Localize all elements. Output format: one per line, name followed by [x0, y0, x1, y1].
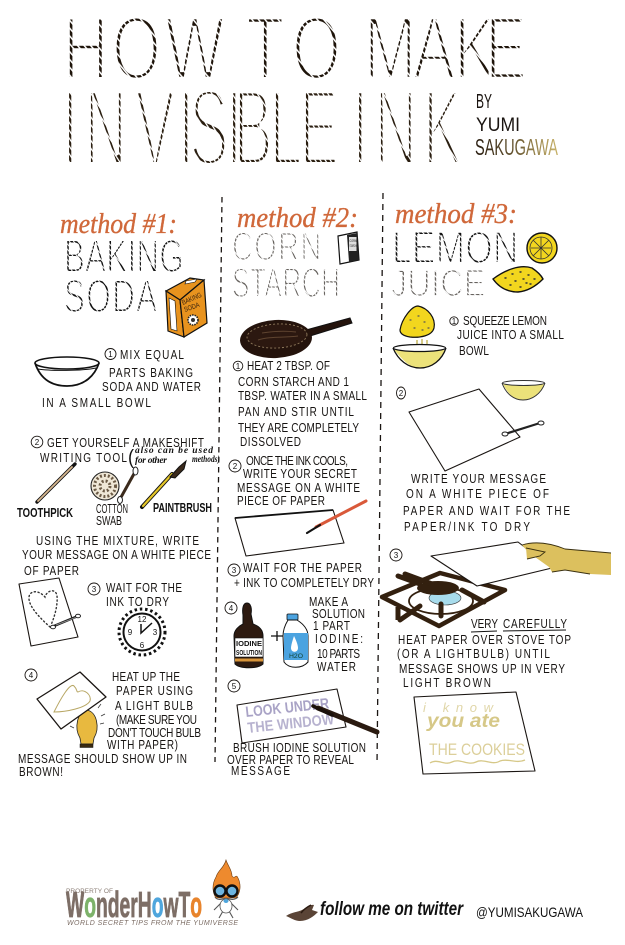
- step 1 text: TBSP. WATER IN A SMALL: [238, 390, 367, 403]
- step 5 text: [227, 742, 366, 778]
- step 4 text: DON'T TOUCH BULB: [108, 727, 201, 740]
- step 4 text: 4: [29, 671, 34, 680]
- step 4 text: MESSAGE SHOULD SHOW UP IN: [18, 753, 187, 766]
- heading: baking soda: SODA: [64, 271, 158, 323]
- heading: lemon juice: JUICE: [391, 263, 485, 305]
- step 2 text: PIECE OF PAPER: [237, 495, 325, 508]
- step 4 text: A LIGHT BULB: [115, 700, 193, 713]
- step 2 text: for other: [135, 456, 167, 466]
- step 5 number: [228, 680, 240, 692]
- icon: squeezed lemon over bowl: [393, 306, 446, 368]
- step 4 text: IODINE:: [315, 633, 363, 646]
- heading: baking soda: BAKING: [64, 231, 184, 283]
- footer: twitter text: @YUMISAKUGAWA: [476, 904, 584, 920]
- icon: clock: 6: [140, 641, 145, 650]
- icon: corn starch box: CORN: [350, 238, 357, 243]
- step 1 text: DISSOLVED: [240, 436, 301, 449]
- step 4 text: 1 PART: [313, 620, 350, 633]
- heading: corn starch: CORN: [232, 224, 321, 269]
- icon: toothpick: [37, 464, 75, 502]
- step 1 text: CORN STARCH AND 1: [238, 376, 349, 389]
- step 2 text: PAPER/INK TO DRY: [404, 521, 530, 534]
- step 2 text: [229, 455, 360, 508]
- icon: lemon slice: [527, 233, 557, 263]
- instruction text: USING THE MIXTURE, WRITE: [36, 535, 199, 548]
- icon: frying pan: [239, 318, 352, 360]
- step 2 text: 2: [35, 438, 40, 447]
- step 1 text: 1: [236, 362, 241, 371]
- step 2 text: WRITE YOUR SECRET: [243, 468, 357, 481]
- step 4 number: 4: [229, 604, 234, 613]
- step 2 text: ONCE THE INK COOLS,: [246, 455, 348, 468]
- step 3 text: LIGHT BROWN: [403, 677, 491, 690]
- heading: method 3: method #3:: [395, 199, 517, 230]
- step 3 text: [88, 582, 182, 609]
- tool labels: PAINTBRUSH: [153, 500, 212, 515]
- step 2 text: (: [128, 447, 134, 469]
- icon: light bulb and paper: [37, 672, 106, 748]
- step 4 text: MAKE A: [309, 596, 348, 609]
- step 4 text: BROWN!: [19, 766, 63, 779]
- icon: revealed message and brush: LOOK UNDER: [245, 695, 330, 721]
- instruction text: OF PAPER: [24, 565, 79, 578]
- step 1 text: HEAT 2 TBSP. OF: [247, 360, 330, 373]
- step 2 text: 2: [233, 462, 238, 471]
- icon: paper with brown message: THE COOKIES: [429, 740, 525, 759]
- icon: clock: 3: [153, 628, 158, 637]
- icon: paper with dotted heart: [19, 578, 80, 646]
- icon: paper with brown message: [414, 692, 535, 774]
- step 3 text: 3: [92, 585, 97, 594]
- step 3 text: WAIT FOR THE PAPER: [243, 562, 362, 575]
- step 4 text: HEAT UP THE: [112, 671, 180, 684]
- heading: baking soda: [64, 231, 184, 323]
- icon: hand holding paper: [431, 542, 611, 586]
- heading: method 2: method #2:: [237, 203, 358, 234]
- icon: clock: 9: [128, 628, 133, 637]
- icon: mixing bowl: [35, 357, 99, 386]
- icon: gas stove burner: [382, 573, 505, 626]
- panel: method 1 baking soda: [17, 209, 220, 779]
- title: HOW TO MAKE: [63, 0, 527, 99]
- icon: bird: [286, 905, 318, 921]
- heading: corn starch: STARCH: [232, 260, 340, 307]
- step 2 number: [396, 387, 406, 399]
- icon: clock: [119, 609, 165, 655]
- heading: corn starch: [232, 224, 340, 307]
- step 5 text: BRUSH IODINE SOLUTION: [233, 742, 366, 755]
- icon: baking soda box: BAKING: [181, 292, 203, 307]
- step 4 text: PAPER USING: [116, 685, 193, 698]
- byline: [475, 91, 558, 160]
- icon: iodine bottle: [234, 603, 263, 668]
- step 2 text: also can be used: [135, 446, 213, 456]
- step 1 text: PARTS BAKING: [109, 367, 193, 380]
- icon: revealed message and brush: [237, 689, 377, 743]
- icon: paper with brown message: i know: [423, 700, 495, 715]
- icon: paper with swab: [409, 389, 544, 471]
- step 4 text: WATER: [317, 661, 356, 674]
- heading: lemon juice: LEMON: [392, 222, 518, 273]
- step 1 text: [233, 360, 367, 449]
- step 3 number: [390, 549, 402, 561]
- step 3 text: (OR A LIGHTBULB) UNTIL: [397, 648, 550, 661]
- icon: iodine bottle: SOLUTION: [236, 648, 262, 657]
- icon: paintbrush: [142, 461, 186, 507]
- step 4 text: [309, 596, 365, 674]
- footer: WonderHowTo logo: PROPERTY OF: [66, 888, 113, 895]
- step 1 text: BOWL: [459, 345, 489, 358]
- icon: paper with brown message: you ate: [426, 711, 500, 732]
- step 1 text: PAN AND STIR UNTIL: [238, 406, 354, 419]
- icon: baking soda box: SODA: [183, 302, 201, 314]
- step 1 text: IN A SMALL BOWL: [42, 397, 151, 410]
- step 2 text: WRITING TOOL: [40, 452, 127, 465]
- step 1 text: SODA AND WATER: [102, 381, 201, 394]
- icon: flame mascot: [213, 860, 240, 918]
- icon: water bottle: H2O: [289, 654, 303, 660]
- step 2 number: 2: [399, 389, 404, 398]
- step 4 text: [18, 669, 201, 779]
- icon: revealed message and brush: THE WINDOW: [247, 711, 336, 737]
- step 3 text: [397, 618, 571, 690]
- icon: corn starch box: STARCH: [350, 243, 357, 248]
- footer: WonderHowTo logo: WonderHowTo: [66, 886, 202, 926]
- step 2 text: MESSAGE ON A WHITE: [237, 482, 360, 495]
- heading: method 1: method #1:: [60, 209, 177, 240]
- icon: cotton swab: [91, 467, 138, 504]
- step 1 text: THEY ARE COMPLETELY: [238, 422, 359, 435]
- byline: YUMI: [476, 115, 520, 136]
- step 1 text: 1: [108, 350, 113, 359]
- instruction text: YOUR MESSAGE ON A WHITE PIECE: [22, 549, 211, 562]
- icon: paper with pen: [235, 501, 366, 556]
- footer: twitter text: follow me on twitter: [320, 899, 464, 920]
- step 2 text: [403, 473, 570, 534]
- step 2 text: ON A WHITE PIECE OF: [406, 488, 549, 501]
- step 1 text: MIX EQUAL: [120, 349, 184, 362]
- step 2 text: PAPER AND WAIT FOR THE: [403, 505, 570, 518]
- icon: water bottle: [283, 614, 308, 667]
- step 3 text: + INK TO COMPLETELY DRY: [234, 577, 374, 590]
- step 2 text: WRITE YOUR MESSAGE: [411, 473, 546, 486]
- step 3 text: MESSAGE SHOWS UP IN VERY: [399, 663, 565, 676]
- step 3 text: INK TO DRY: [106, 596, 169, 609]
- step 4 text: WITH PAPER): [107, 739, 178, 752]
- icon: corn starch box: [338, 232, 359, 264]
- step 3 number: 3: [394, 551, 399, 560]
- title: [62, 0, 527, 189]
- title: INVISIBLE INK: [62, 67, 462, 189]
- byline: BY: [476, 91, 492, 113]
- step 3 text: [228, 562, 374, 590]
- step 5 text: OVER PAPER TO REVEAL: [227, 754, 354, 767]
- step 1 text: [42, 348, 201, 410]
- step 2 text: methods): [192, 454, 220, 465]
- icon: baking soda box: [166, 278, 207, 337]
- icon: clock: 12: [138, 615, 147, 624]
- tool labels: [17, 500, 212, 528]
- step 3 text: CAREFULLY: [503, 618, 567, 631]
- icon: plus sign: [271, 631, 283, 641]
- icon: small bowl of juice: [502, 380, 545, 400]
- tool labels: TOOTHPICK: [17, 505, 73, 520]
- step 3 text: HEAT PAPER OVER STOVE TOP: [398, 634, 571, 647]
- step 2 text: GET YOURSELF A MAKESHIFT: [47, 437, 204, 450]
- tool labels: SWAB: [96, 514, 122, 528]
- step 4 text: 10 PARTS: [317, 648, 360, 661]
- icon: iodine bottle: IODINE: [236, 639, 262, 648]
- footer: twitter text: [320, 899, 584, 920]
- step 1 text: [450, 315, 564, 358]
- step 3 text: VERY: [471, 618, 498, 631]
- step 5 number: 5: [232, 682, 237, 691]
- step 1 text: 1: [452, 317, 457, 326]
- step 4 text: (MAKE SURE YOU: [116, 714, 197, 727]
- byline: SAKUGAWA: [475, 134, 558, 160]
- step 2 text: [31, 436, 220, 469]
- step 3 text: WAIT FOR THE: [106, 582, 182, 595]
- step 3 text: 3: [232, 566, 237, 575]
- panel: method 3 lemon juice: [382, 199, 611, 774]
- icon: whole lemon: [493, 267, 543, 292]
- instruction text: [22, 535, 211, 578]
- step 4 text: SOLUTION: [312, 608, 365, 621]
- heading: lemon juice: [391, 222, 518, 305]
- panel: method 2 corn starch: [225, 203, 377, 778]
- step 5 text: MESSAGE: [231, 765, 290, 778]
- step 4 number: [225, 602, 237, 614]
- step 1 text: JUICE INTO A SMALL: [457, 329, 564, 342]
- step 1 text: SQUEEZE LEMON: [463, 315, 547, 328]
- tool labels: COTTON: [96, 502, 128, 516]
- footer: WonderHowTo logo: WORLD SECRET TIPS FROM THE YUMIVERSE: [67, 920, 238, 927]
